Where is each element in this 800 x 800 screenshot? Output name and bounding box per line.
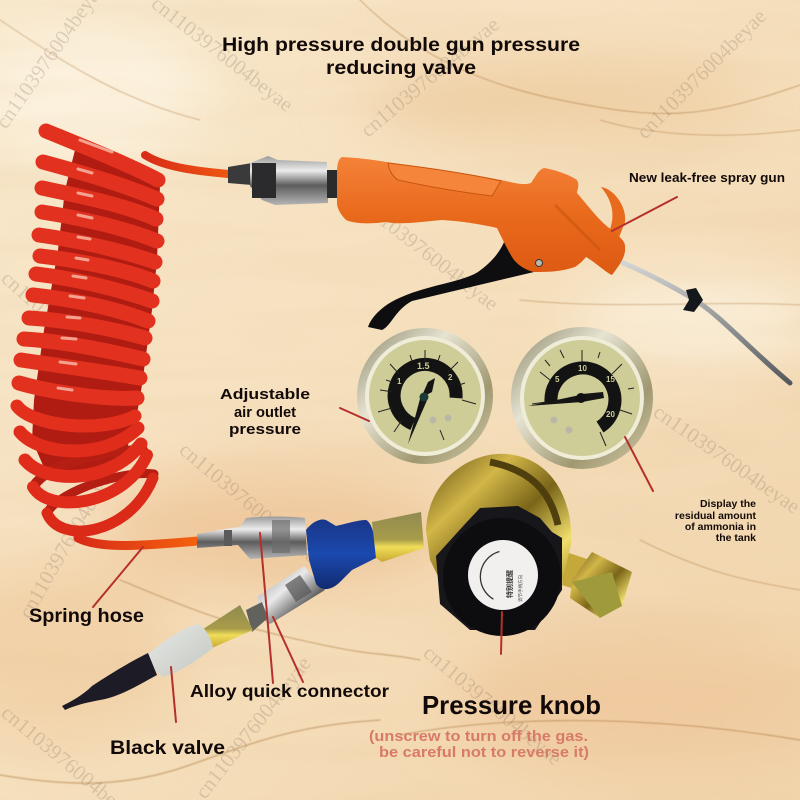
- right pressure gauge: 20: [606, 410, 615, 419]
- body ridge: [555, 205, 600, 250]
- white sleeve: [148, 624, 213, 677]
- front rings: [19, 131, 158, 398]
- annotation lines: [93, 197, 677, 722]
- black knob: [443, 518, 561, 636]
- hose tail to gun: [145, 155, 252, 176]
- right pressure gauge: 5: [555, 375, 560, 384]
- label: residual ammonia: [675, 498, 756, 544]
- air spray gun: [228, 156, 790, 383]
- white knob label: [468, 540, 538, 610]
- label: residual ammonia: Display the: [700, 498, 756, 510]
- left pressure gauge: 2: [448, 373, 453, 382]
- silver quick connector lower: [246, 566, 325, 632]
- gun connector: [228, 156, 340, 205]
- hose tail to connector: [78, 538, 198, 546]
- blue connector: [306, 519, 378, 589]
- label: residual ammonia: the tank: [716, 532, 756, 544]
- dial ticks: [532, 350, 634, 446]
- lower connector assembly: [62, 512, 424, 710]
- black trigger lever: [368, 240, 534, 330]
- silver quick connector upper: [197, 516, 307, 559]
- watermarks: cn1103976004beyae: [175, 437, 323, 567]
- orange gun body: [337, 157, 625, 275]
- title: [222, 35, 580, 79]
- watermarks: cn1103976004beyae: [14, 461, 121, 622]
- title: High pressure double gun pressure: [222, 35, 580, 56]
- brass outlet nut: [562, 552, 632, 618]
- watermarks: cn1103976004beyae: [356, 12, 504, 142]
- brass hex nut left: [372, 512, 424, 562]
- regulator body: [426, 454, 632, 636]
- watermarks: cn1103976004beyae: [190, 652, 315, 800]
- pressure knob warning: [369, 728, 589, 761]
- watermarks: cn1103976004beyae: [649, 399, 800, 518]
- left pressure gauge: 1: [397, 377, 402, 386]
- coil inner shadow: [32, 150, 160, 470]
- label: residual ammonia: of ammonia in: [685, 521, 756, 533]
- ring highlights: [58, 140, 112, 390]
- right pressure gauge: 15: [606, 375, 615, 384]
- brass body disc: [426, 454, 571, 590]
- dial ticks: [378, 350, 476, 440]
- label: air outlet pressure: Adjustable: [220, 386, 310, 403]
- grip panel: [388, 163, 501, 196]
- watermarks: cn1103976004beyae: [632, 4, 771, 144]
- white knob label: 调节手柄方向: [517, 575, 524, 602]
- white knob label: 特别提醒: [505, 570, 514, 598]
- black knob base: [436, 506, 562, 630]
- watermarks: cn1103976004beyae: [0, 266, 141, 399]
- left pressure gauge: [357, 328, 493, 464]
- right pressure gauge: [511, 327, 653, 469]
- label: spray gun: New leak-free spray gun: [629, 171, 785, 185]
- left pressure gauge: 1.5: [417, 361, 430, 371]
- black valve tip: [62, 653, 157, 710]
- lower loops: [17, 406, 154, 531]
- label: pressure knob: Pressure knob: [422, 690, 601, 720]
- rubber collar: [683, 288, 703, 312]
- rivet: [536, 260, 542, 266]
- title: reducing valve: [326, 58, 476, 79]
- label: alloy quick connector: Alloy quick connector: [190, 681, 389, 701]
- label: residual ammonia: residual amount: [675, 510, 756, 522]
- right pressure gauge: 10: [578, 364, 587, 373]
- watermarks: cn1103976004beyae: [352, 190, 503, 315]
- label: air outlet pressure: air outlet: [234, 404, 296, 421]
- metal nozzle: [621, 262, 790, 383]
- pressure knob warning: (unscrew to turn off the gas.: [369, 728, 588, 745]
- label: air outlet pressure: pressure: [229, 421, 301, 438]
- label: air outlet pressure: [220, 386, 310, 438]
- hook: [601, 187, 625, 240]
- watermarks: cn1103976004beyae: [419, 640, 567, 770]
- brass slot: [490, 462, 558, 525]
- label: spring hose: Spring hose: [29, 606, 144, 627]
- label: black valve: Black valve: [110, 738, 225, 759]
- brass fitting lower: [197, 605, 253, 648]
- spring hose coil: [17, 131, 252, 546]
- pressure knob warning: be careful not to reverse it): [379, 744, 589, 761]
